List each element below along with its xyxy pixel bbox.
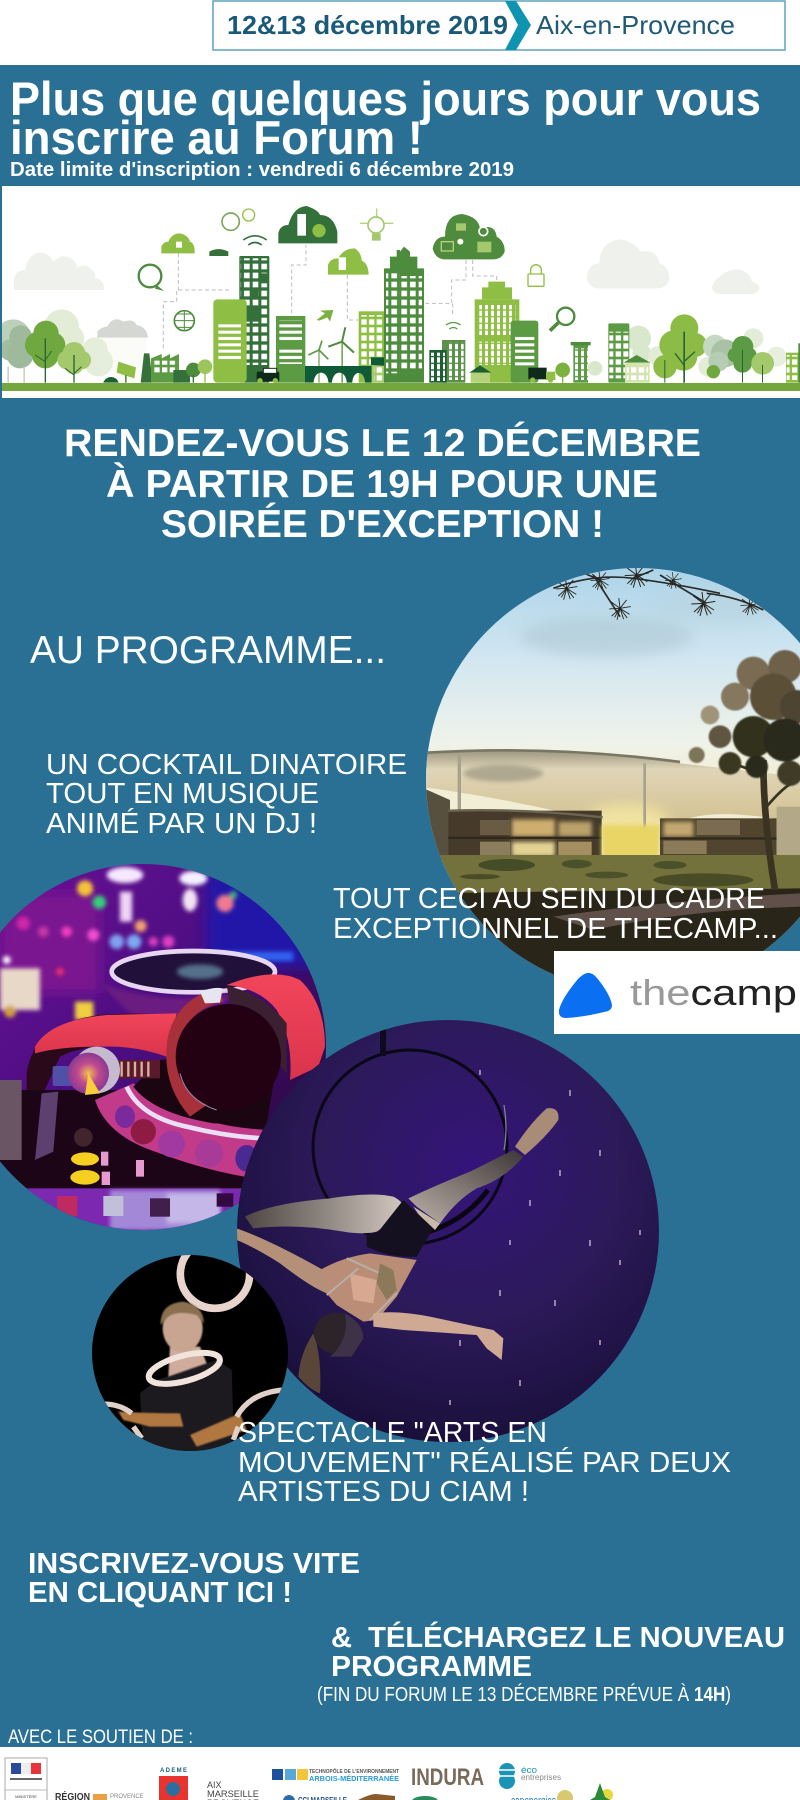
text: cocktail (46, 749, 407, 840)
call to action: inscrivez-vous: INSCRIVEZ-VOUS VITE (28, 1548, 360, 1580)
text: au programme: AU PROGRAMME... (30, 629, 386, 672)
logo: cci marseille (283, 1795, 348, 1800)
date banner: 12&13 décembre 2019 (227, 10, 508, 40)
cloud icons (139, 206, 393, 348)
call to action: programme: PROGRAMME (331, 1651, 532, 1683)
photo: DJ headphones (0, 860, 347, 1233)
logo: région: PROVENCE (110, 1794, 144, 1800)
text: spectacle: ARTISTES DU CIAM ! (238, 1476, 529, 1508)
logo: technopôle arbois-méditerranée: TECHNOPÔLE DE L'ENVIRONNEMENT (309, 1767, 400, 1775)
title block (10, 72, 761, 181)
acrobat figure (237, 1108, 559, 1393)
photo: aerial hoop acrobat (237, 1020, 660, 1443)
call to action: programme: & TÉLÉCHARGEZ LE NOUVEAU (331, 1620, 785, 1654)
logo: aix-marseille-provence: AIX (207, 1780, 222, 1790)
text: spectacle (238, 1417, 731, 1508)
text: spectacle: MOUVEMENT" RÉALISÉ PAR DEUX (238, 1446, 731, 1479)
city right half (400, 214, 800, 383)
logo: thecamp: the camp (630, 972, 797, 1013)
smart city illustration (0, 186, 800, 398)
logo: éco-entreprises: entreprises (521, 1773, 561, 1782)
title block: inscrire au Forum ! (10, 111, 423, 164)
call to action: programme (331, 1620, 785, 1683)
photo: thecamp building (420, 560, 800, 993)
heading: rendez-vous: À PARTIR DE 19H POUR UNE (106, 462, 658, 506)
text: avec le soutien de: AVEC LE SOUTIEN DE : (8, 1727, 193, 1748)
text: cocktail: ANIMÉ PAR UN DJ ! (46, 807, 317, 840)
title block: Date limite d'inscription : vendredi 6 décembre 2019 (10, 159, 514, 181)
logo: green round mark (412, 1796, 438, 1800)
logo: ministère: MINISTÈRE (15, 1794, 37, 1799)
header strip (0, 0, 800, 65)
call to action: inscrivez-vous: EN CLIQUANT ICI ! (28, 1577, 292, 1609)
hoop (313, 1020, 507, 1244)
title block: Plus que quelques jours pour vous (10, 72, 761, 125)
logo: grasshopper mark (358, 1794, 395, 1800)
ground strip (2, 383, 800, 391)
date banner (213, 1, 785, 50)
logo: indura: INDURA (411, 1764, 484, 1791)
logo: pointed emblem (590, 1783, 613, 1800)
date banner: Aix-en-Provence (536, 10, 735, 40)
sponsors strip (0, 1747, 800, 1800)
logo: ademe (159, 1768, 188, 1800)
city left half (0, 206, 400, 383)
text: cocktail: TOUT EN MUSIQUE (46, 778, 319, 810)
logo: aix-marseille-provence: MARSEILLE (207, 1789, 259, 1799)
call to action: inscrivez-vous (28, 1548, 360, 1609)
text: thecamp setting: TOUT CECI AU SEIN DU CADRE (333, 883, 765, 915)
heading: rendez-vous: RENDEZ-VOUS LE 12 DÉCEMBRE (64, 421, 701, 465)
logo: capenergies (511, 1790, 573, 1800)
logo: région (55, 1790, 144, 1800)
photo: juggler (92, 1239, 288, 1453)
text: thecamp setting (333, 883, 778, 945)
logo: aix-marseille-provence (207, 1780, 259, 1800)
heading: rendez-vous: SOIRÉE D'EXCEPTION ! (161, 502, 604, 546)
logo: ademe: ADEME (160, 1768, 187, 1774)
logo: technopôle arbois-méditerranée: ARBOIS-MÉDITERRANÉE (309, 1774, 399, 1783)
text: spectacle: SPECTACLE "ARTS EN (238, 1417, 547, 1449)
text: cocktail: UN COCKTAIL DINATOIRE (46, 749, 407, 781)
rain specks (450, 1070, 640, 1405)
logo: ministère (5, 1758, 47, 1800)
logo: éco-entreprises (498, 1763, 561, 1789)
logo: technopôle arbois-méditerranée (272, 1767, 400, 1783)
logo: éco-entreprises: éco (521, 1765, 537, 1775)
heading: rendez-vous (64, 421, 701, 546)
logo: thecamp (554, 951, 800, 1034)
text: thecamp setting: EXCEPTIONNEL DE THECAMP... (333, 913, 778, 945)
note: fin du forum: (FIN DU FORUM LE 13 DÉCEMBRE PRÉVUE À 14H) (317, 1683, 731, 1706)
